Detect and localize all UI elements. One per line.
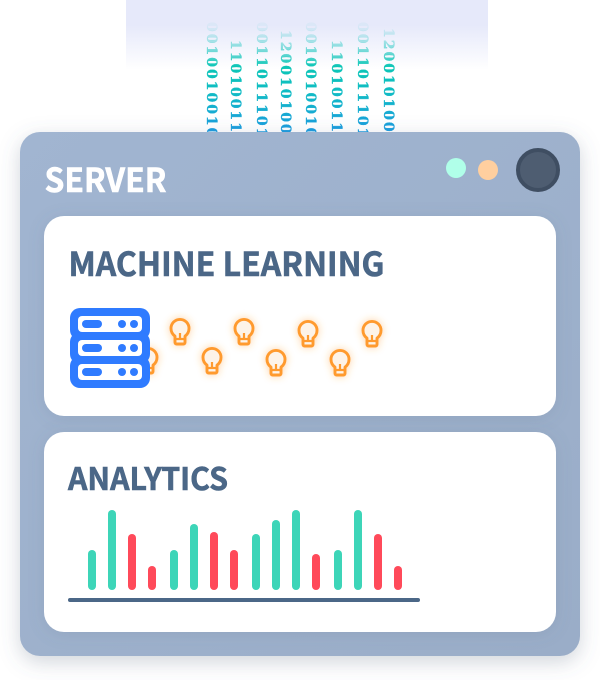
panel: server [20,132,580,656]
data beam background [126,0,488,70]
binary data streams: 12001010010 [380,28,396,157]
binary data streams: 00100100101 [203,22,219,151]
binary data streams: 1200101001 [277,30,293,147]
binary data streams: 00110111011 [253,22,269,151]
icon: server stack [70,308,150,388]
heading: server: SERVER [44,154,166,202]
binary data streams: 110100111 [227,40,243,146]
panel: analytics [44,432,556,632]
heading: machine learning: MACHINE LEARNING [68,238,384,286]
icons: light bulbs [139,319,381,375]
panel: machine learning [44,216,556,416]
binary data streams: 110100111 [328,40,344,146]
binary data streams [203,22,396,157]
binary data streams: 00110111011 [354,22,370,151]
binary data streams: 00100100101 [302,22,318,151]
status lights [446,150,558,190]
bar chart [68,510,420,602]
heading: analytics: ANALYTICS [67,454,228,499]
